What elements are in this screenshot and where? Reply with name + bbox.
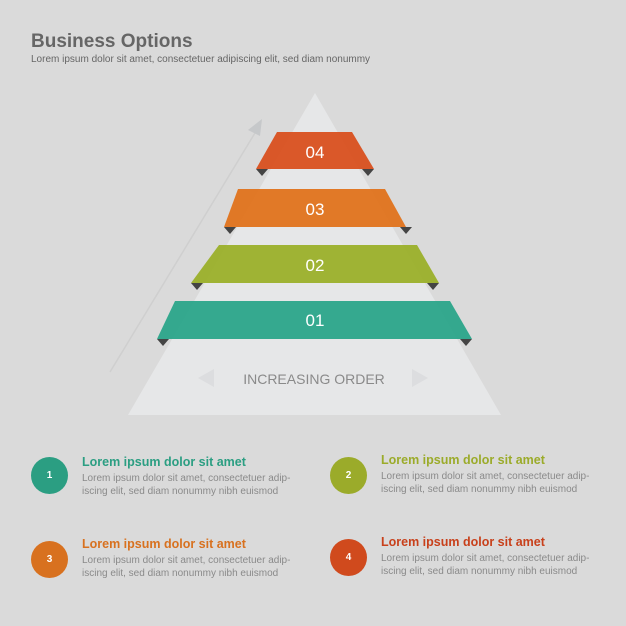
- item 2: Lorem ipsum dolor sit amet: [381, 453, 545, 467]
- band 04: [256, 132, 374, 176]
- item 2: Lorem ipsum dolor sit amet, consectetuer adip-iscing elit, sed diam nonummy nibh euismod: [381, 471, 589, 495]
- band 01: [157, 301, 472, 346]
- item 2: 2: [346, 470, 351, 481]
- arrow: increasing diagonal: [110, 119, 262, 372]
- title: Business Options: [31, 31, 193, 52]
- subtitle: Lorem ipsum dolor sit amet, consectetuer adipiscing elit, sed diam nonummy: [31, 54, 370, 65]
- label: increasing order: INCREASING ORDER: [243, 371, 385, 387]
- item 1: 1: [47, 470, 52, 481]
- item 4: 4: [346, 552, 351, 563]
- band 01: 01: [306, 311, 324, 330]
- item 1: Lorem ipsum dolor sit amet: [82, 455, 246, 469]
- item 3: [31, 537, 290, 579]
- item 1: [31, 455, 290, 497]
- item 4: Lorem ipsum dolor sit amet: [381, 535, 545, 549]
- item 3: 3: [47, 554, 52, 565]
- item 1: Lorem ipsum dolor sit amet, consectetuer adip-iscing elit, sed diam nonummy nibh euismod: [82, 473, 290, 497]
- item 2: [330, 453, 589, 495]
- band 03: [224, 189, 412, 234]
- item 3: Lorem ipsum dolor sit amet, consectetuer adip-iscing elit, sed diam nonummy nibh euismod: [82, 555, 290, 579]
- band 04: 04: [306, 143, 324, 162]
- item 4: [330, 535, 589, 577]
- label: increasing order: [198, 369, 428, 387]
- pyramid base: [128, 93, 501, 415]
- band 03: 03: [306, 200, 324, 219]
- item 4: Lorem ipsum dolor sit amet, consectetuer adip-iscing elit, sed diam nonummy nibh euismod: [381, 553, 589, 577]
- item 3: Lorem ipsum dolor sit amet: [82, 537, 246, 551]
- band 02: 02: [306, 256, 324, 275]
- band 02: [191, 245, 439, 290]
